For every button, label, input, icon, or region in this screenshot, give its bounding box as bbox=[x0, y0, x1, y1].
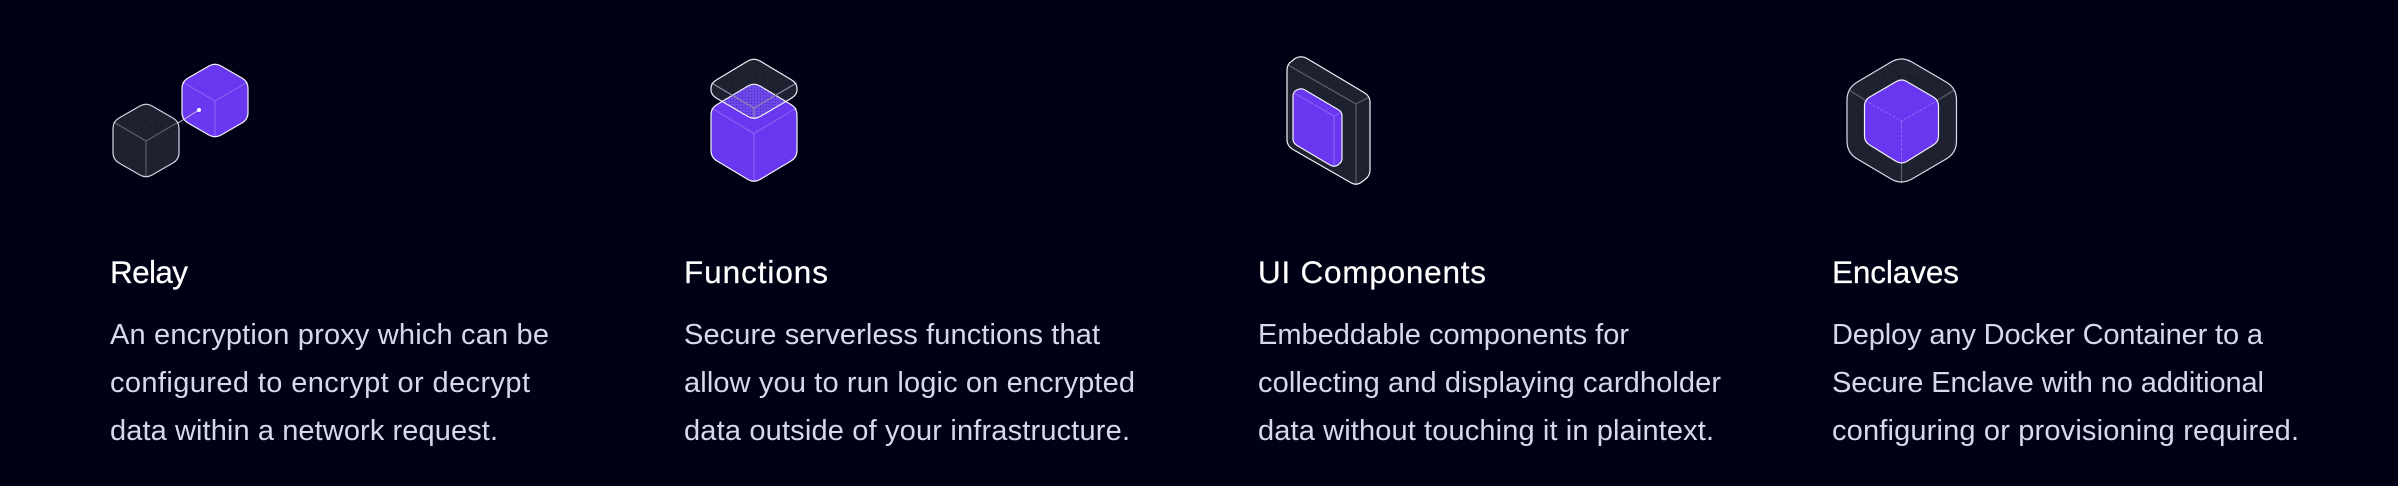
description: Enclaves: Secure Enclave with no additional bbox=[1832, 367, 2264, 399]
icon: cube with floating lid bbox=[711, 59, 797, 181]
description: UI Components: collecting and displaying cardholder bbox=[1258, 367, 1721, 399]
description: Functions: allow you to run logic on encrypted bbox=[684, 367, 1135, 399]
description: Relay: An encryption proxy which can be bbox=[110, 319, 549, 351]
purple cube bbox=[182, 64, 248, 137]
description: Enclaves: Deploy any Docker Container to a bbox=[1832, 319, 2264, 351]
description: UI Components: data without touching it in plaintext. bbox=[1258, 415, 1714, 447]
outer slab bbox=[1287, 57, 1370, 184]
panel: Enclaves bbox=[1832, 59, 2299, 447]
description: Enclaves: configuring or provisioning required. bbox=[1832, 415, 2299, 447]
panel: Functions bbox=[684, 59, 1135, 447]
description: UI Components bbox=[1258, 319, 1721, 447]
purple cube body bbox=[711, 84, 797, 181]
description: Functions: Secure serverless functions that bbox=[684, 319, 1100, 351]
inner purple panel bbox=[1293, 89, 1342, 166]
inner purple cube bbox=[1864, 80, 1938, 163]
description: UI Components: Embeddable components for bbox=[1258, 319, 1629, 351]
heading: UI Components: UI Components bbox=[1258, 254, 1486, 290]
description: Relay: configured to encrypt or decrypt bbox=[110, 367, 530, 399]
heading: Relay: Relay bbox=[110, 254, 188, 290]
lid slab fill bbox=[711, 59, 797, 118]
icon: slab with embedded purple panel bbox=[1287, 57, 1370, 184]
description: Functions: data outside of your infrastructure. bbox=[684, 415, 1130, 447]
icon: two connected cubes bbox=[113, 64, 248, 177]
outer hexagon bbox=[1847, 59, 1956, 183]
description: Enclaves bbox=[1832, 319, 2299, 447]
heading: Enclaves: Enclaves bbox=[1832, 254, 1959, 290]
description: Functions bbox=[684, 319, 1135, 447]
description: Relay bbox=[110, 319, 549, 447]
connector line with dot bbox=[178, 108, 201, 123]
heading: Functions: Functions bbox=[684, 254, 828, 290]
gray cube bbox=[113, 104, 179, 177]
description: Relay: data within a network request. bbox=[110, 415, 498, 447]
panel: UI Components bbox=[1258, 57, 1721, 447]
panel: Relay bbox=[110, 64, 549, 447]
lid slab outline bbox=[711, 59, 797, 119]
icon: cube inside hexagon bbox=[1847, 59, 1956, 183]
